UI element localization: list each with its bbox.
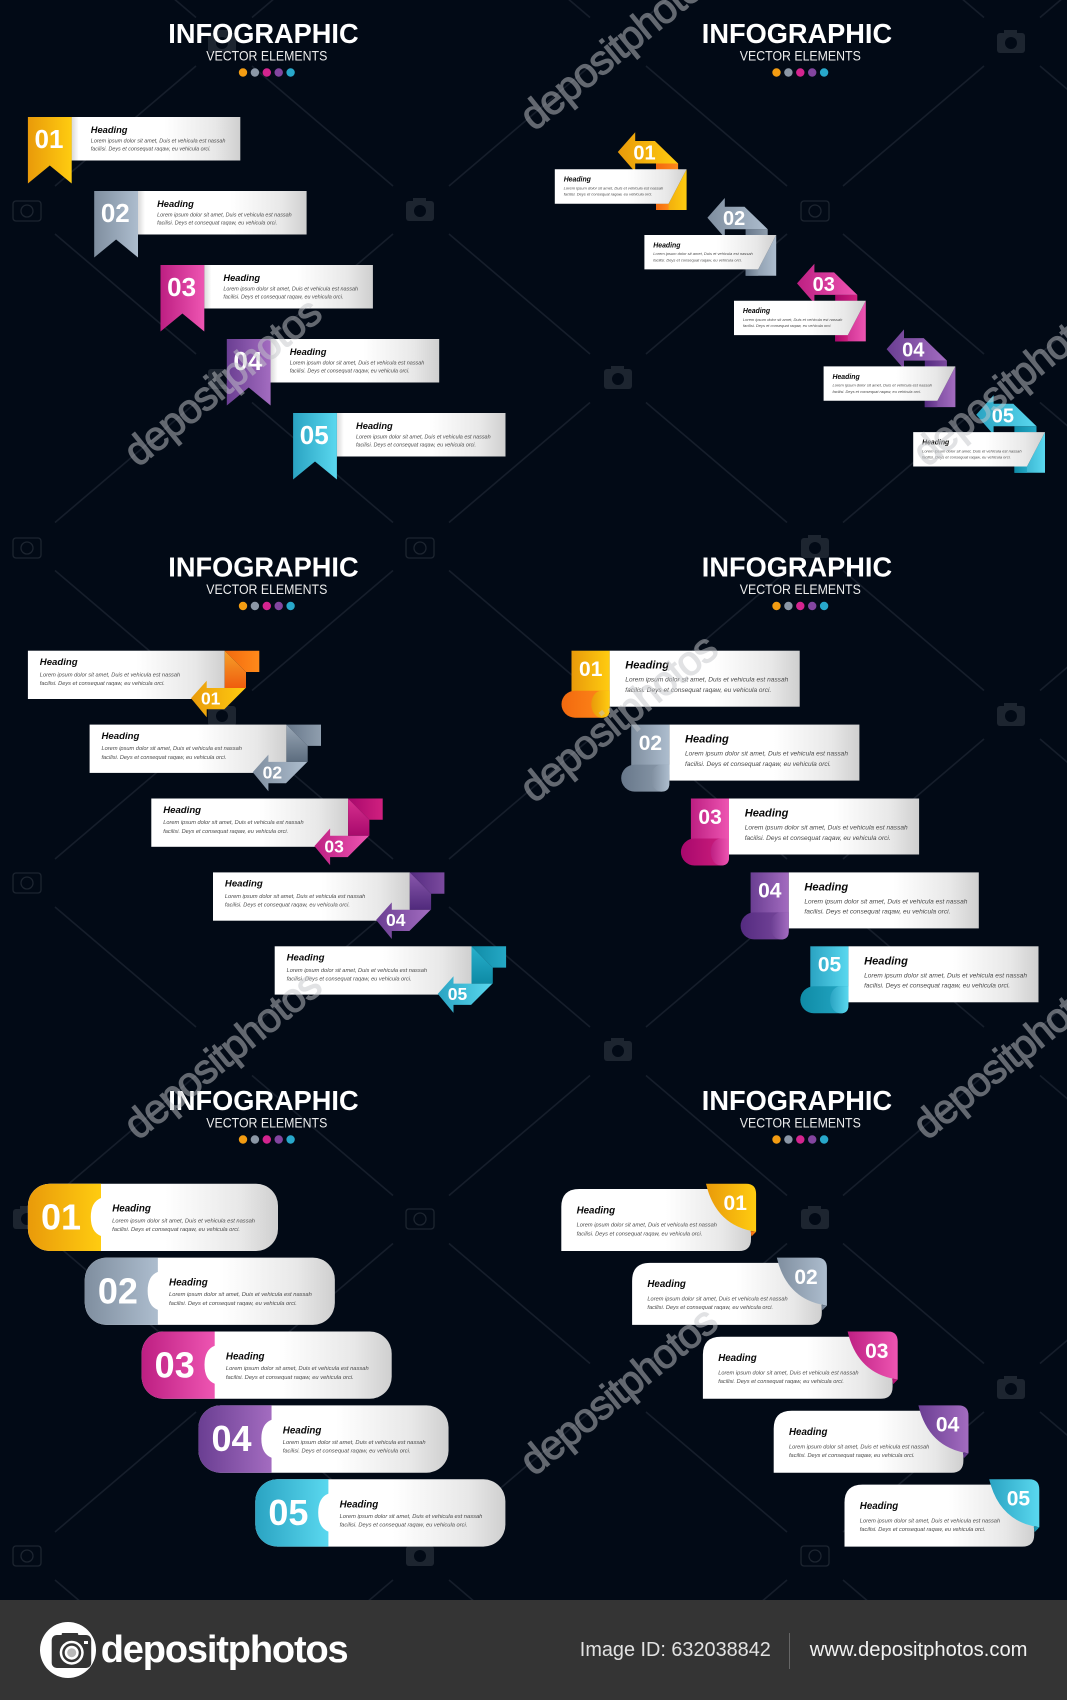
step 01 <box>28 1184 278 1251</box>
number 03: 03 <box>324 836 344 856</box>
step 04 <box>824 329 955 407</box>
scroll tab 05 <box>800 946 848 1013</box>
number 02: 02 <box>723 208 745 230</box>
text block 02: Lorem ipsum dolor sit amet, Duis et vehicula est nassah <box>647 1297 788 1303</box>
text block 04: Lorem ipsum dolor sit amet, Duis et vehicula est nassah <box>832 383 933 388</box>
text block 02: Lorem ipsum dolor sit amet, Duis et vehicula est nassah <box>169 1292 312 1298</box>
text block 05 <box>356 421 491 449</box>
text block 04: Heading <box>832 374 860 381</box>
title: VECTOR ELEMENTS <box>206 581 327 597</box>
step 02 <box>94 191 307 258</box>
website: www.depositphotos.com <box>809 1639 1028 1661</box>
fold 01 <box>225 651 259 688</box>
text block 04: Lorem ipsum dolor sit amet, Duis et vehicula est nassah <box>789 1444 929 1450</box>
text block 05: Heading <box>356 421 393 431</box>
step 05 <box>275 946 506 1013</box>
text block 04: facilisi. Deys et consequat raqaw, eu vehicula orci. <box>225 903 350 909</box>
ribbon 02 <box>94 191 138 258</box>
text block 04: Heading <box>804 881 848 893</box>
text block 02: Heading <box>157 199 194 209</box>
text block 05: Heading <box>287 953 325 964</box>
title: INFOGRAPHIC <box>168 1085 359 1116</box>
number 04: 04 <box>386 910 406 930</box>
text block 02: Heading <box>653 242 681 249</box>
image id: Image ID: 632038842 <box>580 1639 771 1661</box>
number 03: 03 <box>167 272 196 302</box>
panel: rounded pills <box>28 1085 505 1547</box>
colored cap 02 <box>85 1258 158 1325</box>
text block 01 <box>577 1205 717 1237</box>
panel: cards with folded arrows <box>28 552 506 1013</box>
text block 02: facilisi. Deys et consequat raqaw, eu vehicula orci. <box>685 761 831 768</box>
title: INFOGRAPHIC <box>168 18 359 49</box>
ribbon 03 <box>160 265 204 332</box>
text block 02: Lorem ipsum dolor sit amet, Duis et vehicula est nassah <box>653 251 754 256</box>
text block 03: Heading <box>226 1351 265 1362</box>
text block 04: Heading <box>290 347 327 357</box>
text block 04 <box>832 374 933 394</box>
panel: arrows above slanted cards <box>555 18 1045 473</box>
step 02 <box>644 198 776 276</box>
step 03 <box>142 1332 392 1399</box>
text block 05: Lorem ipsum dolor sit amet, Duis et vehicula est nassah <box>287 968 427 974</box>
colored cap 03 <box>142 1332 215 1399</box>
card 03 <box>734 301 866 341</box>
text block 05: facilisi. Deys et consequat raqaw, eu vehicula orci. <box>340 1523 467 1529</box>
number 01: 01 <box>201 688 221 708</box>
arrow 02 <box>707 198 768 238</box>
ribbon 01 <box>28 117 72 184</box>
step 04 <box>774 1405 968 1473</box>
number 01: 01 <box>35 124 63 154</box>
step 05 <box>844 1479 1039 1547</box>
logo wordmark: depositphotos <box>101 1629 349 1671</box>
number 01: 01 <box>633 142 656 164</box>
text block 04 <box>290 347 424 375</box>
corner tab 02 <box>777 1258 827 1310</box>
step 03 <box>160 265 373 332</box>
text block 05 <box>922 440 1022 460</box>
text block 01: Lorem ipsum dolor sit amet, Duis et vehicula est nassah <box>625 677 789 684</box>
step 03 <box>151 798 383 865</box>
title: INFOGRAPHIC <box>702 552 892 582</box>
step 04 <box>198 1405 449 1473</box>
title: INFOGRAPHIC <box>168 552 359 582</box>
text block 03 <box>223 273 358 301</box>
fold 05 <box>472 946 506 984</box>
text block 03: Lorem ipsum dolor sit amet, Duis et vehicula est nassah <box>226 1366 369 1372</box>
text block 01: facilisi. Deys et consequat raqaw, eu vehicula orci. <box>564 192 652 197</box>
scroll tab 04 <box>741 872 789 939</box>
arrow 02 <box>253 755 307 791</box>
text block 02: Heading <box>169 1278 208 1289</box>
title <box>702 552 892 610</box>
panel: corner tab cards <box>561 1085 1039 1547</box>
step 04 <box>741 872 979 939</box>
text block 01: Heading <box>91 125 128 135</box>
diagonal depositphotos watermarks: depositphotos <box>115 288 330 475</box>
text block 01: Heading <box>112 1204 151 1215</box>
text block 03: Lorem ipsum dolor sit amet, Duis et vehicula est nassah <box>745 825 908 832</box>
footer bar <box>0 1600 1067 1700</box>
text block 05: Lorem ipsum dolor sit amet, Duis et vehicula est nassah <box>340 1514 482 1520</box>
text block 03: Lorem ipsum dolor sit amet, Duis et vehicula est nassah <box>718 1370 859 1376</box>
text block 02 <box>169 1278 312 1307</box>
text block 04: facilisi. Deys et consequat raqaw, eu vehicula orci. <box>804 909 951 916</box>
text block 02: Heading <box>647 1279 686 1290</box>
text block 02 <box>157 199 292 227</box>
text block 03: facilisi. Deys et consequat raqaw, eu vehicula orci. <box>223 295 343 301</box>
text block 04 <box>225 879 365 909</box>
text block 05: facilisi. Deys et consequat raqaw, eu vehicula orci. <box>860 1527 986 1533</box>
text block 03: Lorem ipsum dolor sit amet, Duis et vehicula est nassah <box>743 317 843 322</box>
text block 02: facilisi. Deys et consequat raqaw, eu vehicula orci. <box>653 257 742 262</box>
card 01 <box>555 169 687 210</box>
text block 02: Lorem ipsum dolor sit amet, Duis et vehicula est nassah <box>102 746 242 752</box>
number 04: 04 <box>902 340 925 362</box>
text block 03: facilisi. Deys et consequat raqaw, eu vehicula orci. <box>743 323 831 328</box>
step 02 <box>632 1258 827 1325</box>
text block 05: Lorem ipsum dolor sit amet, Duis et vehicula est nassah <box>864 972 1027 979</box>
card 02 <box>644 235 776 276</box>
text block 03 <box>745 808 908 842</box>
step 03 <box>703 1332 898 1399</box>
text block 05: Heading <box>864 955 908 967</box>
title <box>168 18 359 77</box>
number 04: 04 <box>212 1418 252 1459</box>
corner tab 04 <box>918 1405 968 1458</box>
title: VECTOR ELEMENTS <box>740 581 861 597</box>
number 03: 03 <box>865 1340 888 1363</box>
text block 03 <box>226 1352 369 1381</box>
text block 03: Lorem ipsum dolor sit amet, Duis et vehicula est nassah <box>223 286 358 292</box>
colored cap 05 <box>255 1479 328 1547</box>
number 05: 05 <box>818 954 841 977</box>
text block 04: Heading <box>225 879 263 890</box>
text block 04: Lorem ipsum dolor sit amet, Duis et vehicula est nassah <box>290 360 424 366</box>
text block 03: Heading <box>223 273 260 283</box>
text block 03: Heading <box>743 308 771 315</box>
text block 03: Heading <box>163 805 201 816</box>
step 02 <box>621 725 859 792</box>
panel: ribbon bookmarks <box>28 18 506 480</box>
text block 01: facilisi. Deys et consequat raqaw, eu vehicula orci. <box>112 1227 240 1233</box>
text block 02: Heading <box>685 734 729 746</box>
step 01 <box>562 651 800 718</box>
text block 03: facilisi. Deys et consequat raqaw, eu vehicula orci. <box>226 1375 354 1381</box>
text block 04 <box>789 1427 929 1459</box>
panel: scroll tabs <box>562 552 1038 1013</box>
number 05: 05 <box>300 420 329 450</box>
diagonal depositphotos watermarks: depositphotos <box>115 961 330 1148</box>
number 04: 04 <box>758 880 782 903</box>
arrow 03 <box>314 828 369 865</box>
number 02: 02 <box>794 1266 818 1289</box>
diagonal depositphotos watermarks <box>115 0 1067 1484</box>
corner tab 03 <box>848 1332 898 1384</box>
diagonal depositphotos watermarks: depositphotos <box>511 624 726 811</box>
number 05: 05 <box>1007 1488 1030 1511</box>
step 05 <box>913 395 1045 473</box>
text block 04: facilisi. Deys et consequat raqaw, eu vehicula orci. <box>832 389 921 394</box>
number 01: 01 <box>724 1192 747 1215</box>
step 04 <box>213 872 444 939</box>
title <box>168 1085 359 1144</box>
title: INFOGRAPHIC <box>702 1085 892 1116</box>
icon: logo camera <box>40 1622 96 1678</box>
text block 02 <box>685 734 848 768</box>
text block 02: facilisi. Deys et consequat raqaw, eu vehicula orci. <box>157 221 277 227</box>
text block 01: Heading <box>564 177 592 184</box>
title <box>702 18 892 77</box>
text block 04: Heading <box>283 1425 321 1436</box>
card 04 <box>824 366 955 407</box>
number 02: 02 <box>101 198 130 228</box>
title: VECTOR ELEMENTS <box>206 48 327 64</box>
scroll tab 03 <box>681 798 729 866</box>
number 05: 05 <box>992 405 1014 427</box>
step 01 <box>28 651 259 717</box>
text block 03 <box>718 1353 858 1385</box>
text block 05 <box>287 953 427 983</box>
number 03: 03 <box>698 806 722 829</box>
scroll tab 01 <box>562 651 610 718</box>
step 05 <box>800 946 1038 1013</box>
text block 05: facilisi. Deys et consequat raqaw, eu vehicula orci. <box>356 443 476 449</box>
step 05 <box>255 1479 505 1547</box>
fold 04 <box>410 872 444 910</box>
text block 03: Heading <box>718 1353 757 1364</box>
ribbon 04 <box>227 339 271 406</box>
arrow 01 <box>191 681 246 717</box>
step 02 <box>85 1258 335 1325</box>
arrow 04 <box>376 902 431 939</box>
text block 01 <box>91 125 225 153</box>
fold 02 <box>286 725 321 762</box>
number 03: 03 <box>155 1344 195 1385</box>
text block 02: facilisi. Deys et consequat raqaw, eu vehicula orci. <box>169 1301 297 1307</box>
text block 01: facilisi. Deys et consequat raqaw, eu vehicula orci. <box>91 147 211 153</box>
arrow 04 <box>887 329 947 369</box>
step 01 <box>561 1184 756 1251</box>
number 03: 03 <box>813 274 835 296</box>
text block 05: Heading <box>340 1499 378 1510</box>
text block 01: Lorem ipsum dolor sit amet, Duis et vehicula est nassah <box>577 1223 717 1229</box>
text block 05: Lorem ipsum dolor sit amet, Duis et vehicula est nassah <box>922 448 1022 453</box>
text block 04 <box>283 1425 426 1455</box>
step 03 <box>734 264 866 341</box>
title: VECTOR ELEMENTS <box>206 1114 327 1130</box>
text block 02 <box>102 731 242 761</box>
arrow 03 <box>797 264 857 303</box>
text block 05: Heading <box>860 1501 898 1512</box>
number 02: 02 <box>263 762 282 782</box>
text block 05 <box>864 955 1027 990</box>
diagonal depositphotos watermarks: depositphotos <box>511 1297 726 1484</box>
text block 04: facilisi. Deys et consequat raqaw, eu vehicula orci. <box>789 1453 915 1459</box>
arrow 05 <box>976 395 1036 435</box>
text block 05: facilisi. Deys et consequat raqaw, eu vehicula orci. <box>922 454 1011 459</box>
step 05 <box>293 413 506 480</box>
text block 01 <box>564 177 664 197</box>
fold 03 <box>348 798 383 836</box>
text block 01 <box>112 1204 255 1233</box>
text block 04: Lorem ipsum dolor sit amet, Duis et vehicula est nassah <box>804 898 968 905</box>
number 05: 05 <box>448 984 467 1004</box>
card 05 <box>913 432 1045 473</box>
text block 01: Heading <box>577 1205 615 1216</box>
text block 02: Lorem ipsum dolor sit amet, Duis et vehicula est nassah <box>157 212 292 218</box>
text block 02 <box>647 1279 788 1311</box>
text block 04: Lorem ipsum dolor sit amet, Duis et vehicula est nassah <box>225 894 365 900</box>
text block 03: facilisi. Deys et consequat raqaw, eu vehicula orci. <box>718 1379 844 1385</box>
step 04 <box>227 339 439 406</box>
text block 05: Lorem ipsum dolor sit amet, Duis et vehicula est nassah <box>356 434 491 440</box>
title: INFOGRAPHIC <box>702 18 892 49</box>
text block 02: facilisi. Deys et consequat raqaw, eu vehicula orci. <box>647 1305 773 1311</box>
number 04: 04 <box>936 1414 960 1437</box>
number 04: 04 <box>233 346 263 376</box>
colored cap 01 <box>28 1184 101 1251</box>
text block 01: facilisi. Deys et consequat raqaw, eu vehicula orci. <box>625 687 771 694</box>
arrow 05 <box>438 976 492 1013</box>
text block 01 <box>40 657 180 687</box>
text block 01: facilisi. Deys et consequat raqaw, eu vehicula orci. <box>577 1231 702 1237</box>
text block 01 <box>625 660 789 694</box>
title: VECTOR ELEMENTS <box>740 48 861 64</box>
arrow 01 <box>618 132 678 172</box>
text block 05: facilisi. Deys et consequat raqaw, eu vehicula orci. <box>287 977 412 983</box>
number 05: 05 <box>268 1492 308 1533</box>
step 01 <box>555 132 687 210</box>
title <box>702 1085 892 1144</box>
text block 01: Lorem ipsum dolor sit amet, Duis et vehicula est nassah <box>112 1218 255 1224</box>
step 02 <box>90 725 321 791</box>
text block 05 <box>340 1499 482 1529</box>
text block 03: facilisi. Deys et consequat raqaw, eu vehicula orci. <box>163 829 288 835</box>
text block 04: Heading <box>789 1427 828 1438</box>
text block 01: facilisi. Deys et consequat raqaw, eu vehicula orci. <box>40 681 165 687</box>
text block 05 <box>860 1501 1000 1533</box>
text block 05: Lorem ipsum dolor sit amet, Duis et vehicula est nassah <box>860 1518 1000 1524</box>
text block 02 <box>653 242 754 262</box>
number 01: 01 <box>41 1196 81 1238</box>
title <box>168 552 359 610</box>
number 01: 01 <box>579 658 603 681</box>
text block 01: Lorem ipsum dolor sit amet, Duis et vehicula est nassah <box>91 138 225 144</box>
title: VECTOR ELEMENTS <box>740 1114 861 1130</box>
text block 01: Heading <box>40 657 78 668</box>
corner tab 05 <box>989 1479 1039 1532</box>
text block 01: Lorem ipsum dolor sit amet, Duis et vehicula est nassah <box>564 186 664 190</box>
step 01 <box>28 117 240 184</box>
text block 04: facilisi. Deys et consequat raqaw, eu vehicula orci. <box>290 369 410 375</box>
text block 04: Lorem ipsum dolor sit amet, Duis et vehicula est nassah <box>283 1440 426 1446</box>
scroll tab 02 <box>621 725 669 792</box>
text block 04 <box>804 881 968 916</box>
text block 02: facilisi. Deys et consequat raqaw, eu vehicula orci. <box>102 755 226 761</box>
text block 01: Lorem ipsum dolor sit amet, Duis et vehicula est nassah <box>40 672 180 678</box>
text block 05: Heading <box>922 439 950 446</box>
corner tab 01 <box>706 1184 756 1236</box>
text block 04: facilisi. Deys et consequat raqaw, eu vehicula orci. <box>283 1449 411 1455</box>
text block 05: facilisi. Deys et consequat raqaw, eu vehicula orci. <box>864 983 1010 990</box>
text block 03: Heading <box>745 808 789 820</box>
text block 03: facilisi. Deys et consequat raqaw, eu vehicula orci. <box>745 835 891 842</box>
text block 03: Lorem ipsum dolor sit amet, Duis et vehicula est nassah <box>163 820 304 826</box>
step 03 <box>681 798 919 866</box>
text block 03 <box>743 308 843 328</box>
ribbon 05 <box>293 413 337 480</box>
text block 02: Heading <box>102 731 139 742</box>
number 02: 02 <box>98 1270 138 1311</box>
text block 03 <box>163 805 304 835</box>
text block 01: Heading <box>625 660 669 672</box>
number 02: 02 <box>639 732 662 755</box>
text block 02: Lorem ipsum dolor sit amet, Duis et vehicula est nassah <box>685 751 848 758</box>
colored cap 04 <box>198 1405 272 1473</box>
